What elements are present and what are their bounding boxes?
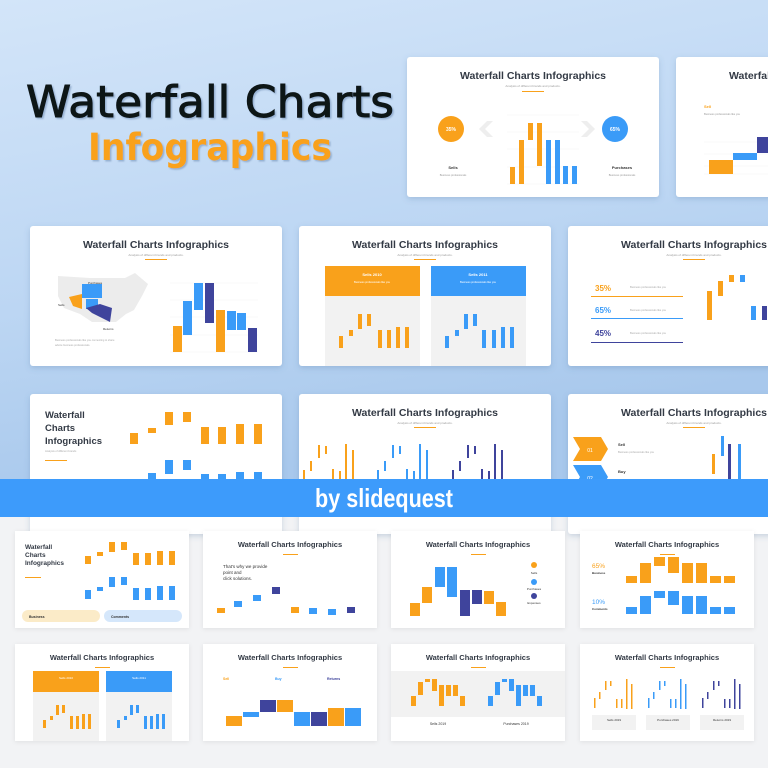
bottom card 4: 65% 10%: [580, 531, 754, 628]
card: two year charts: Analysis of different brands: [45, 449, 77, 453]
card: two year charts: [30, 394, 282, 534]
bottom card 6: sell buy returns: Buy: [275, 677, 282, 681]
bottom card 3: legend chart: Sells: [531, 571, 538, 575]
bottom card 1: two charts with pills: Waterfall: [25, 544, 52, 551]
bottom card 7: sells/purchases gray band: Purchases 2019: [503, 722, 529, 726]
map: Purchases: [88, 281, 103, 285]
bottom card 5: sells 2010/2011: Sells 2010: [59, 676, 73, 680]
bottom card 2: provide point: click solutions.: [223, 576, 252, 581]
bottom card 5: sells 2010/2011: Sells 2011: [132, 676, 146, 680]
card: percentages: 45%: [595, 329, 611, 338]
bottom card 1: two charts with pills: Business: [29, 615, 45, 619]
card: percentages: Business professionals like you: [630, 308, 667, 312]
card: sells 2010 / 2011: Waterfall Charts Infographics: [352, 239, 498, 251]
bottom card 2: provide point: Waterfall Charts Infographics: [238, 540, 342, 549]
bottom card 6: sell buy returns: Returns: [327, 677, 340, 681]
card: sells vs purchases: Business professionals: [440, 173, 467, 177]
bottom card 4: 65% 10%: 10%: [592, 599, 605, 606]
bottom card 8: three thin charts: [580, 644, 754, 741]
bottom card 2: provide point: point and: [223, 570, 242, 575]
card: sells vs purchases: Waterfall Charts Infographics: [460, 70, 606, 82]
card: sell buy partial: Sell: [704, 104, 711, 109]
card: sells 2010 / 2011: Business professionals like you: [354, 280, 391, 284]
bottom card 4: 65% 10%: 65%: [592, 563, 605, 570]
card: map waterfall: Analysis of different brands and products.: [128, 253, 184, 257]
card: two year charts: Infographics: [45, 436, 102, 447]
card: sell buy partial: [676, 57, 768, 197]
background bottom: [0, 516, 768, 768]
bottom card 5: sells 2010/2011: [15, 644, 189, 741]
background top: [0, 0, 768, 480]
bottom card 5: sells 2010/2011: Waterfall Charts Infographics: [50, 653, 154, 662]
card: chevrons: 01: [587, 448, 593, 454]
card: percentages: [568, 226, 768, 366]
banner: by slidequest: [0, 479, 768, 517]
card: three thin charts: Analysis of different brands and products.: [397, 421, 453, 425]
card: sells vs purchases: Business professionals: [609, 173, 636, 177]
bottom card 4: 65% 10%: Waterfall Charts Infographics: [615, 540, 719, 549]
map: [58, 273, 148, 331]
bottom card 8: three thin charts: Sells 2019: [607, 718, 621, 722]
bottom card 8: three thin charts: Waterfall Charts Infographics: [615, 653, 719, 662]
card: percentages: Analysis of different brands and products.: [666, 253, 722, 257]
bottom card 7: sells/purchases gray band: Waterfall Charts Infographics: [426, 653, 530, 662]
card: sells vs purchases: 65%: [610, 127, 621, 133]
bottom card 2: provide point: [203, 531, 377, 628]
bottom card 7: sells/purchases gray band: [391, 644, 565, 741]
bottom card 1: two charts with pills: Comments: [111, 615, 129, 619]
bottom card 3: legend chart: [391, 531, 565, 628]
card: sells 2010 / 2011: Analysis of different brands and products.: [397, 253, 453, 257]
bottom card 8: three thin charts: Purchases 2019: [657, 718, 679, 722]
card: sells vs purchases: Analysis of different brands and products.: [505, 84, 561, 88]
card: three thin charts: [299, 394, 551, 534]
card: map waterfall: advice business professionals.: [55, 343, 90, 347]
card: three thin charts: Waterfall Charts Infographics: [352, 407, 498, 419]
card: chevrons: Business professionals like you: [618, 450, 655, 454]
card: map waterfall: [30, 226, 282, 366]
main title: Waterfall Charts: [26, 77, 394, 128]
card: chevrons: Buy: [618, 469, 626, 474]
bottom card 1: two charts with pills: Charts: [25, 552, 46, 559]
card: sells vs purchases: 35%: [446, 127, 457, 133]
card: map waterfall: Waterfall Charts Infographics: [83, 239, 229, 251]
card: percentages: Business professionals like you: [630, 331, 667, 335]
bottom card 4: 65% 10%: Business: [592, 571, 606, 575]
card: sells 2010 / 2011: Sells 2011: [468, 272, 488, 277]
card: chevrons: Waterfall Charts Infographics: [621, 407, 767, 419]
banner: by slidequest: by slidequest: [315, 483, 453, 513]
card: sell buy partial: Business professionals like you: [704, 112, 741, 116]
card: percentages: 65%: [595, 306, 611, 315]
map: Returns: [103, 327, 114, 331]
bottom card 7: sells/purchases gray band: Sells 2019: [430, 722, 446, 726]
card: chevrons: Sell: [618, 442, 625, 447]
card: sells vs purchases: Purchases: [612, 165, 633, 170]
card: two year charts: Waterfall: [45, 410, 85, 421]
bottom card 3: legend chart: Purchases: [527, 587, 542, 591]
map: Sells: [58, 303, 65, 307]
card: percentages: Business professionals like you: [630, 285, 667, 289]
bottom card 1: two charts with pills: Infographics: [25, 560, 64, 567]
card: map waterfall: Business professionals like you connecting to share: [55, 338, 115, 342]
bottom card 3: legend chart: Expenses: [527, 601, 541, 605]
bottom card 6: sell buy returns: Sell: [223, 677, 229, 681]
bottom card 2: provide point: That's why we provide: [223, 564, 268, 569]
card: sells vs purchases: Sells: [448, 165, 458, 170]
bottom card 6: sell buy returns: [203, 644, 377, 741]
card: chevrons: [568, 394, 768, 534]
card: sells vs purchases: [407, 57, 659, 197]
card: percentages: 35%: [595, 284, 611, 293]
card: chevrons: Analysis of different brands and products.: [666, 421, 722, 425]
main title: Infographics: [88, 126, 332, 169]
card: sells 2010 / 2011: Sells 2010: [362, 272, 382, 277]
card: sells 2010 / 2011: Business professionals like you: [460, 280, 497, 284]
card: percentages: Waterfall Charts Infographics: [621, 239, 767, 251]
bottom card 8: three thin charts: Returns 2019: [713, 718, 731, 722]
bottom card 1: two charts with pills: [15, 531, 189, 628]
card: chevrons: 02: [587, 476, 593, 482]
main title: [26, 77, 394, 169]
bottom card 3: legend chart: Waterfall Charts Infographics: [426, 540, 530, 549]
bottom card 4: 65% 10%: Comments: [592, 607, 608, 611]
bottom card 6: sell buy returns: Waterfall Charts Infographics: [238, 653, 342, 662]
card: sells 2010 / 2011: [299, 226, 551, 366]
card: two year charts: Charts: [45, 423, 75, 434]
